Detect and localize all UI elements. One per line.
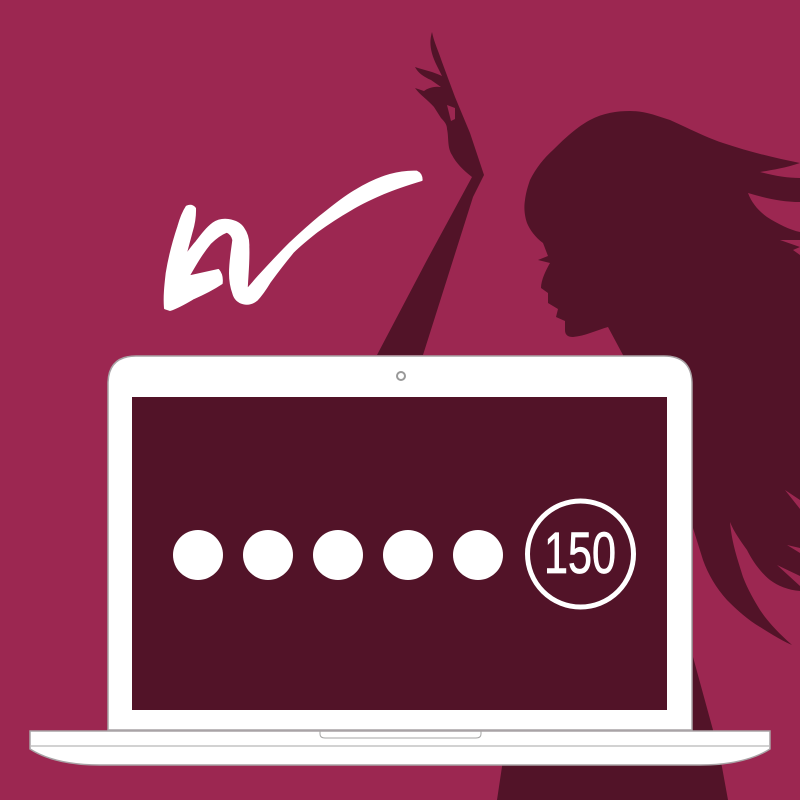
- laptop lid: [108, 356, 692, 730]
- webcam: [397, 372, 405, 380]
- password dots: [173, 530, 503, 580]
- base crease line: [31, 745, 769, 747]
- circled number 150: [528, 501, 634, 607]
- laptop: [30, 356, 770, 765]
- dot 1: [173, 530, 223, 580]
- laptop screen: [132, 397, 667, 710]
- head and hair: [497, 111, 800, 800]
- dot 5: [453, 530, 503, 580]
- dot 2: [243, 530, 293, 580]
- dot 3: [313, 530, 363, 580]
- silhouette: woman with flowing hair and raised arm: [377, 32, 800, 800]
- hand-drawn arrow: [165, 172, 422, 310]
- dot 4: [383, 530, 433, 580]
- trackpad notch: [320, 731, 481, 738]
- circled number 150: 150: [544, 521, 616, 586]
- raised arm and hand: [377, 32, 484, 355]
- laptop base: [30, 731, 770, 765]
